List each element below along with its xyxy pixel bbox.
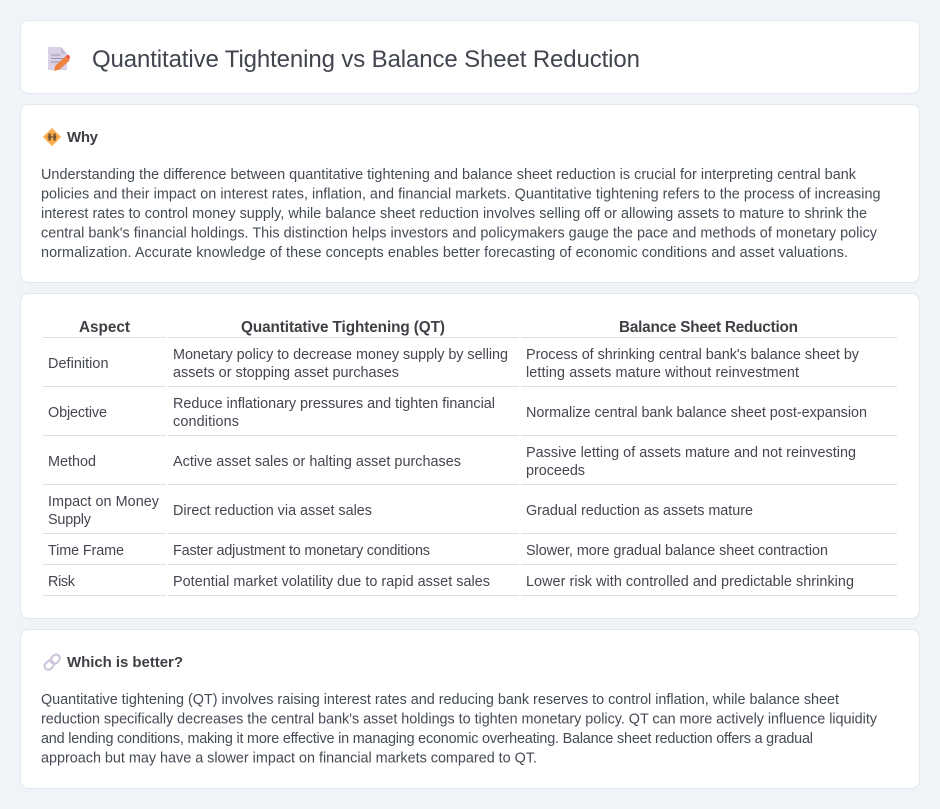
icon: warning diamond bbox=[44, 128, 60, 146]
table header row: Balance Sheet Reduction bbox=[619, 319, 798, 336]
icon: document with pencil bbox=[48, 47, 70, 71]
panel: why bbox=[20, 104, 920, 282]
heading: which is better: Which is better? bbox=[67, 654, 183, 671]
text block: why paragraph: Understanding the difference between quantitative tightening and balance sheet reduction is crucial for interpreting central bank bbox=[41, 167, 857, 183]
text block: why paragraph bbox=[41, 167, 880, 261]
table row: risk: Potential market volatility due to rapid asset sales bbox=[173, 574, 490, 590]
table row: impact on money supply: Direct reduction via asset sales bbox=[173, 503, 372, 519]
text block: which is better paragraph: reduction specifically decreases the central bank's asset holdings to tighten monetary policy. QT can more actively influence liquidity bbox=[41, 712, 878, 728]
text block: which is better paragraph: and lending conditions, making it more effective in managing economic overheating. Balance sheet reduction offers a gradual bbox=[41, 731, 813, 747]
table row: impact on money supply: Impact on Money bbox=[48, 494, 160, 510]
icon: chain link bbox=[43, 653, 61, 671]
title: Quantitative Tightening vs Balance Sheet Reduction bbox=[92, 46, 640, 73]
table row: definition: Definition bbox=[48, 356, 108, 372]
table row: method: Active asset sales or halting asset purchases bbox=[173, 454, 461, 470]
table row: definition: Process of shrinking central bank's balance sheet by bbox=[526, 347, 860, 363]
table row: objective: conditions bbox=[173, 414, 239, 430]
text block: which is better paragraph: approach but may have a slower impact on financial markets compared to QT. bbox=[41, 750, 537, 766]
table row: definition: letting assets mature without reinvestment bbox=[526, 365, 799, 381]
text block: why paragraph: interest rates to control money supply, while balance sheet reduction involves selling off or allowing assets to mature to shrink the bbox=[41, 206, 867, 222]
table row: risk: Lower risk with controlled and predictable shrinking bbox=[526, 574, 854, 590]
table row: method bbox=[43, 445, 897, 485]
table row: definition bbox=[43, 347, 897, 387]
table header row: Aspect bbox=[79, 319, 130, 336]
table row: definition: Monetary policy to decrease money supply by selling bbox=[173, 347, 508, 363]
table row: objective: Reduce inflationary pressures and tighten financial bbox=[173, 396, 495, 412]
text block: why paragraph: policies and their impact on interest rates, inflation, and financial markets. Quantitative tightening refers to the process of increasing bbox=[41, 186, 880, 202]
panel: comparison table bbox=[20, 294, 920, 618]
table row: time frame: Time Frame bbox=[48, 543, 124, 559]
table row: risk bbox=[43, 574, 897, 596]
panel: which is better bbox=[20, 630, 920, 788]
table row: time frame: Slower, more gradual balance sheet contraction bbox=[526, 543, 828, 559]
table row: method: proceeds bbox=[526, 463, 585, 479]
table row: risk: Risk bbox=[48, 574, 76, 590]
table row: objective: Normalize central bank balance sheet post-expansion bbox=[526, 405, 867, 421]
table header row: Quantitative Tightening (QT) bbox=[241, 319, 445, 336]
heading: why: Why bbox=[67, 129, 99, 146]
table row: objective: Objective bbox=[48, 405, 107, 421]
text block: why paragraph: central bank's financial holdings. This distinction helps investors and policymakers gauge the pace and methods of monetary policy bbox=[41, 226, 878, 242]
table row: definition: assets or stopping asset purchases bbox=[173, 365, 399, 381]
text block: which is better paragraph: Quantitative tightening (QT) involves raising interest rates and reducing bank reserves to control inflation, while balance sheet bbox=[41, 692, 839, 708]
text block: which is better paragraph bbox=[41, 692, 878, 766]
table row: impact on money supply: Gradual reduction as assets mature bbox=[526, 503, 753, 519]
text block: why paragraph: normalization. Accurate knowledge of these concepts enables better forecasting of economic conditions and asset valuations. bbox=[41, 245, 848, 261]
table row: impact on money supply bbox=[43, 494, 897, 534]
table row: time frame bbox=[43, 543, 897, 565]
table header row bbox=[43, 319, 897, 338]
table row: impact on money supply: Supply bbox=[48, 512, 92, 528]
table row: method: Method bbox=[48, 454, 96, 470]
table row: method: Passive letting of assets mature and not reinvesting bbox=[526, 445, 856, 461]
panel: header bbox=[20, 20, 920, 94]
table row: objective bbox=[43, 396, 897, 436]
table row: time frame: Faster adjustment to monetary conditions bbox=[173, 543, 430, 559]
